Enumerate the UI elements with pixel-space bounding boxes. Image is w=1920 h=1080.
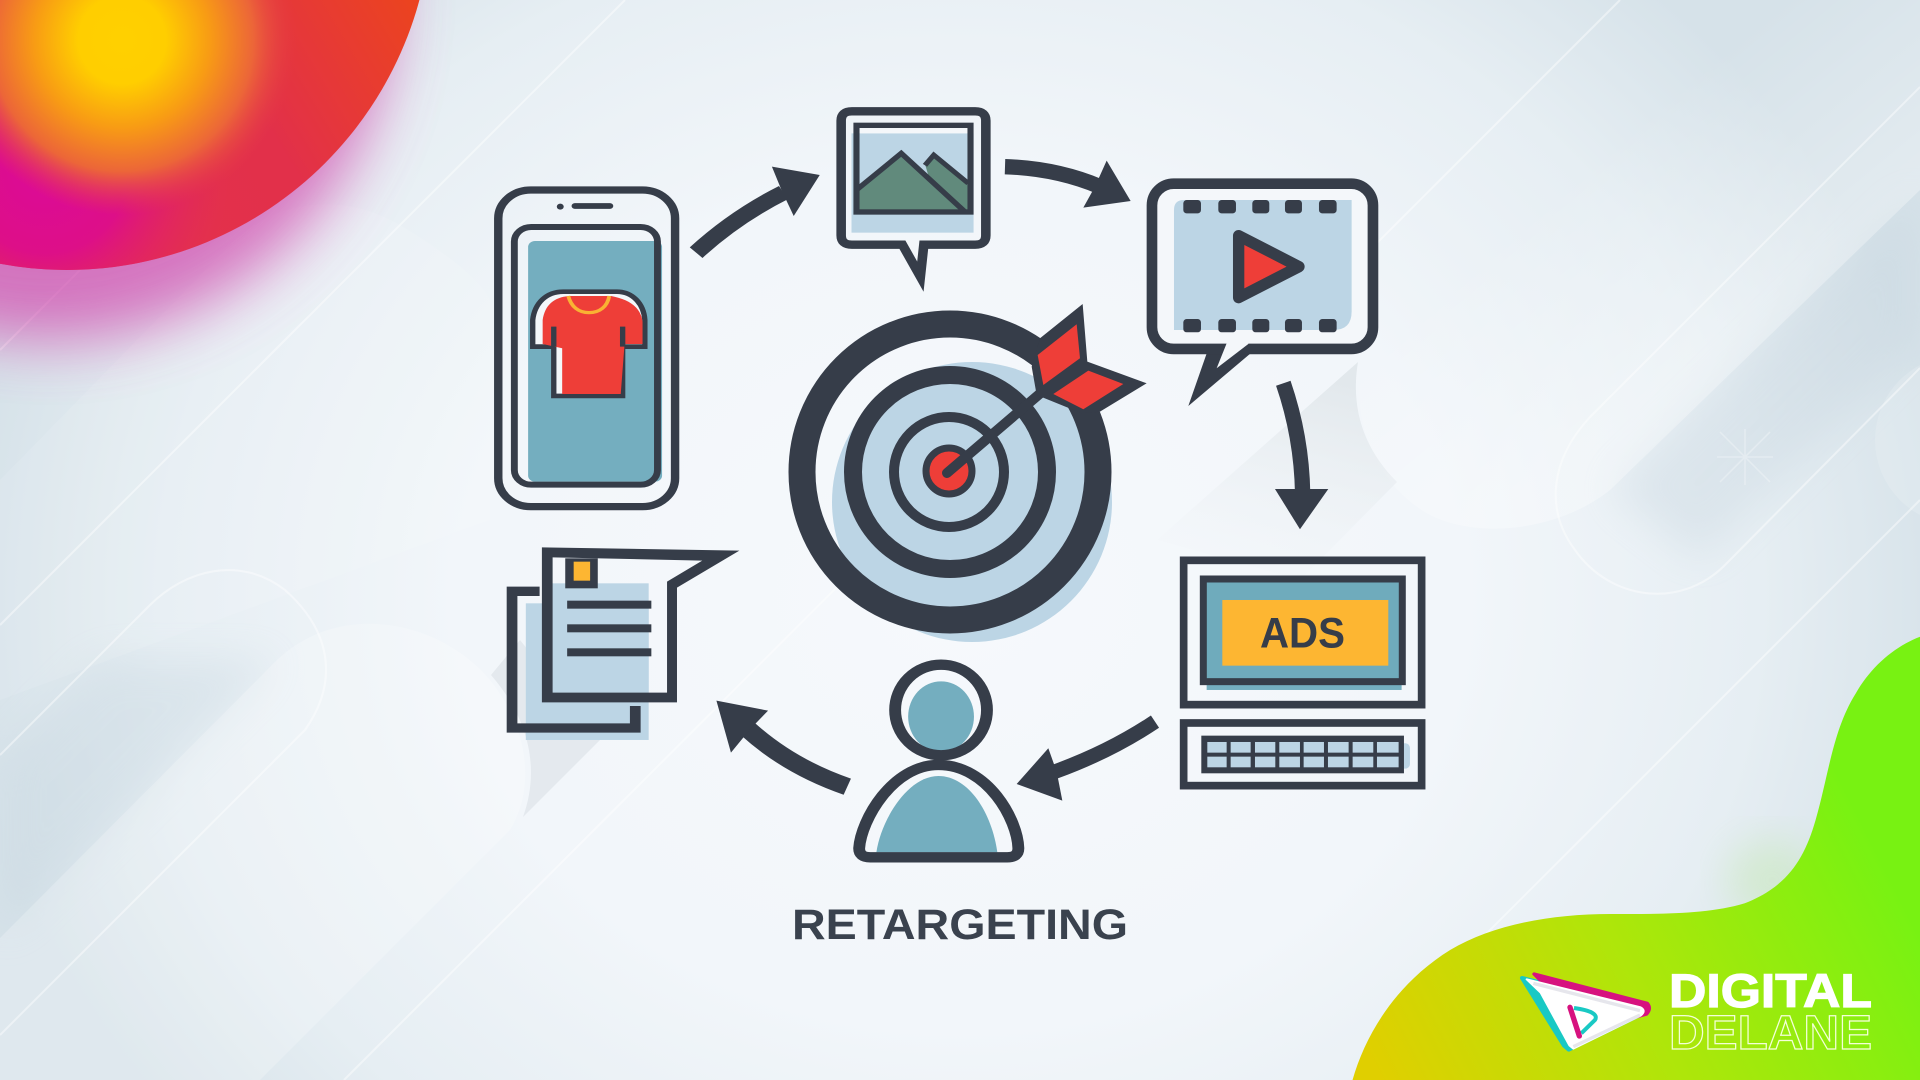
arrow: video to computer (1275, 383, 1328, 529)
glow under top-left blob (0, 0, 390, 340)
arrow: image to video (1005, 161, 1131, 208)
arrow: computer to person (1017, 722, 1155, 801)
top-left gradient circle (0, 0, 432, 270)
label: ads: ADS (1260, 610, 1345, 658)
icon: documents (512, 547, 739, 740)
logo: digital delane (1522, 964, 1872, 1060)
logo icon (1522, 974, 1649, 1050)
icon: target with dart (802, 304, 1147, 642)
icon: phone with t-shirt (498, 190, 675, 507)
wordmark: digital: DIGITAL (1669, 964, 1872, 1017)
arrow: person to documents (716, 701, 847, 787)
title: RETARGETING (792, 901, 1128, 949)
icon: image speech bubble (841, 111, 986, 277)
icon: video speech bubble (1152, 184, 1373, 406)
arrow: phone to image (696, 167, 820, 253)
glow beside green blob (1727, 840, 1817, 920)
bottom-right green blob (1353, 637, 1920, 1080)
wordmark: delane: DELANE (1669, 1007, 1872, 1060)
icon: computer with ads (1184, 560, 1422, 786)
icon: person (859, 665, 1018, 857)
